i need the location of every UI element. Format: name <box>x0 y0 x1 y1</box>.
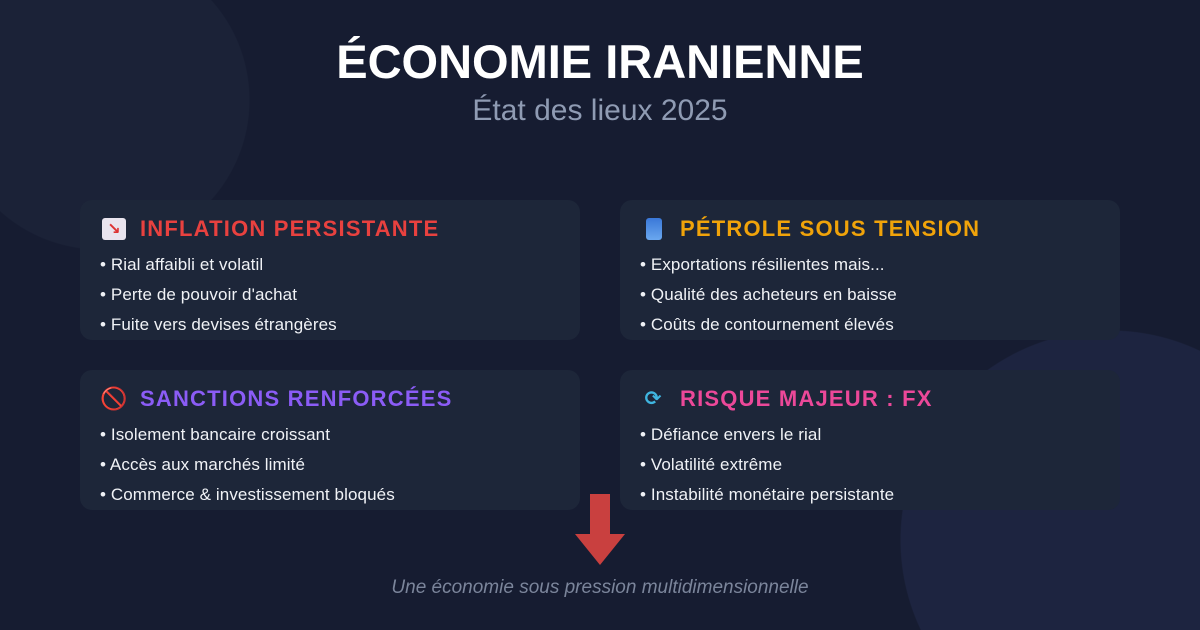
list: sanctions: • Accès aux marchés limité <box>100 455 305 474</box>
list: inflation: • Perte de pouvoir d'achat <box>100 285 297 304</box>
list: fx <box>640 425 894 504</box>
panel: inflation <box>80 200 580 340</box>
panel: petrole <box>620 200 1120 340</box>
heading: fx: RISQUE MAJEUR : FX <box>680 386 933 411</box>
list: fx: • Volatilité extrême <box>640 455 782 474</box>
heading: petrole: PÉTROLE SOUS TENSION <box>680 216 980 241</box>
list: fx: • Instabilité monétaire persistante <box>640 485 894 504</box>
heading: sanctions: 🚫 <box>100 386 127 411</box>
title: ÉCONOMIE IRANIENNE <box>336 35 864 88</box>
list: fx: • Défiance envers le rial <box>640 425 821 444</box>
heading: fx: ⟳ <box>645 388 661 410</box>
footer caption: Une économie sous pression multidimensionnelle <box>391 577 809 598</box>
list: sanctions: • Commerce & investissement bloqués <box>100 485 395 504</box>
panel: fx risk <box>620 370 1120 510</box>
list: sanctions <box>100 425 395 504</box>
heading: inflation: INFLATION PERSISTANTE <box>140 216 439 241</box>
list: petrole: • Coûts de contournement élevés <box>640 315 894 334</box>
list: inflation: • Fuite vers devises étrangères <box>100 315 337 334</box>
list: sanctions: • Isolement bancaire croissant <box>100 425 330 444</box>
list: inflation: • Rial affaibli et volatil <box>100 255 263 274</box>
panel: sanctions <box>80 370 580 510</box>
heading: sanctions: SANCTIONS RENFORCÉES <box>140 386 452 411</box>
list: petrole: • Exportations résilientes mais... <box>640 255 885 274</box>
heading: inflation: ↘ <box>107 221 121 238</box>
subtitle: État des lieux 2025 <box>472 94 728 127</box>
list: inflation <box>100 255 337 334</box>
list: petrole <box>640 255 897 334</box>
list: petrole: • Qualité des acheteurs en baisse <box>640 285 897 304</box>
arrow: down <box>575 494 625 565</box>
